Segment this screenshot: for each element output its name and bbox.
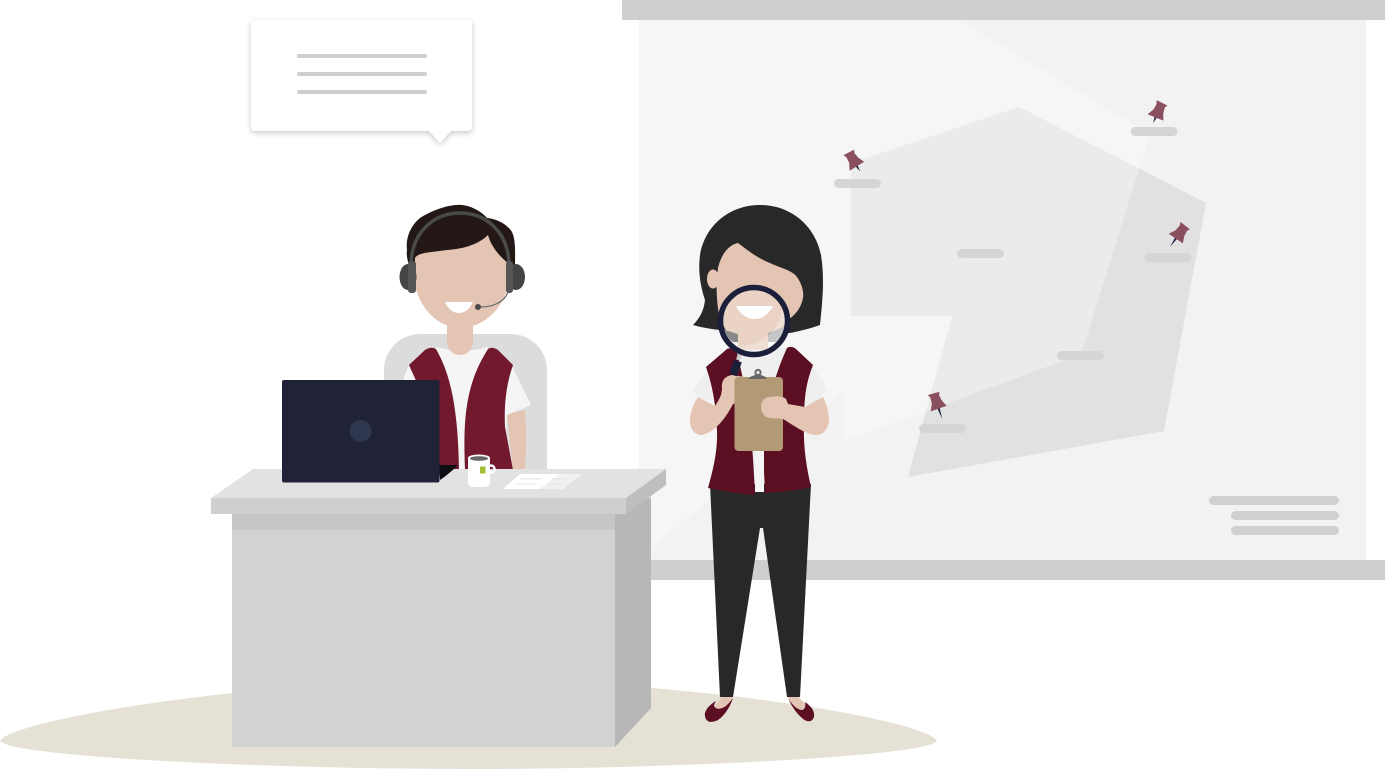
- laptop: [282, 380, 458, 482]
- laptop keyboard: [439, 465, 458, 480]
- agent arm: [507, 410, 526, 472]
- desk side: [615, 497, 651, 747]
- icon: coffee mug: [468, 454, 494, 487]
- woman vest left: [706, 348, 755, 495]
- magnifying glass: [720, 288, 788, 354]
- clipboard: [734, 377, 783, 451]
- desk front lip: [211, 498, 626, 514]
- woman right foot: [788, 697, 807, 711]
- chair: [384, 334, 547, 475]
- map board: [639, 20, 1366, 560]
- papers: [503, 474, 582, 489]
- desk top side: [626, 469, 666, 514]
- woman right arm: [761, 396, 829, 435]
- floor ellipse: [0, 680, 937, 769]
- agent vest left: [409, 348, 459, 470]
- lens highlight: [735, 306, 786, 352]
- headset: [400, 213, 525, 310]
- agent shirt: [403, 347, 531, 472]
- agent vest right: [464, 348, 513, 470]
- top bar: [622, 0, 1385, 20]
- icon: map pin 4: [926, 390, 950, 421]
- desk: [211, 469, 666, 747]
- laptop logo: [350, 420, 372, 442]
- lens ring: [720, 288, 788, 354]
- icon: map pin 2: [1145, 99, 1170, 127]
- woman smile: [736, 306, 773, 319]
- woman vest right: [763, 347, 813, 493]
- label bars: [834, 127, 1192, 433]
- agent smile: [445, 302, 473, 313]
- desk top: [211, 469, 666, 498]
- woman face: [717, 243, 803, 347]
- speech bubble: [251, 20, 472, 143]
- woman left shoe: [705, 698, 733, 722]
- panel: wall map: [622, 0, 1385, 580]
- desk under-shadow: [232, 514, 615, 530]
- woman right shoe: [788, 698, 814, 721]
- map shape: [851, 107, 1206, 477]
- woman hair: [693, 205, 823, 333]
- woman shirt: [692, 348, 828, 470]
- lens hair segments: [725, 330, 738, 342]
- laptop screen: [282, 380, 440, 482]
- figure: call centre agent: [400, 205, 531, 472]
- woman shirt centre strip: [755, 448, 764, 492]
- lens tint: [721, 288, 787, 354]
- legend bars: [1209, 496, 1339, 535]
- woman ear: [707, 270, 719, 288]
- woman left arm: [690, 375, 745, 435]
- agent hair: [407, 205, 515, 268]
- desk body: [232, 514, 615, 747]
- light beam overlay: [639, 20, 1150, 558]
- agent face: [415, 235, 508, 328]
- figure: woman inspector: [690, 205, 829, 722]
- icon: map pin 3: [1163, 220, 1192, 252]
- bottom bar: [622, 560, 1385, 580]
- icon: map pin 1: [841, 148, 867, 176]
- woman neck: [738, 330, 768, 350]
- agent neck: [447, 320, 473, 355]
- woman trousers: [710, 484, 811, 697]
- magnifier handle: [733, 350, 741, 375]
- woman left foot: [713, 697, 732, 710]
- clipboard clip: [748, 370, 767, 379]
